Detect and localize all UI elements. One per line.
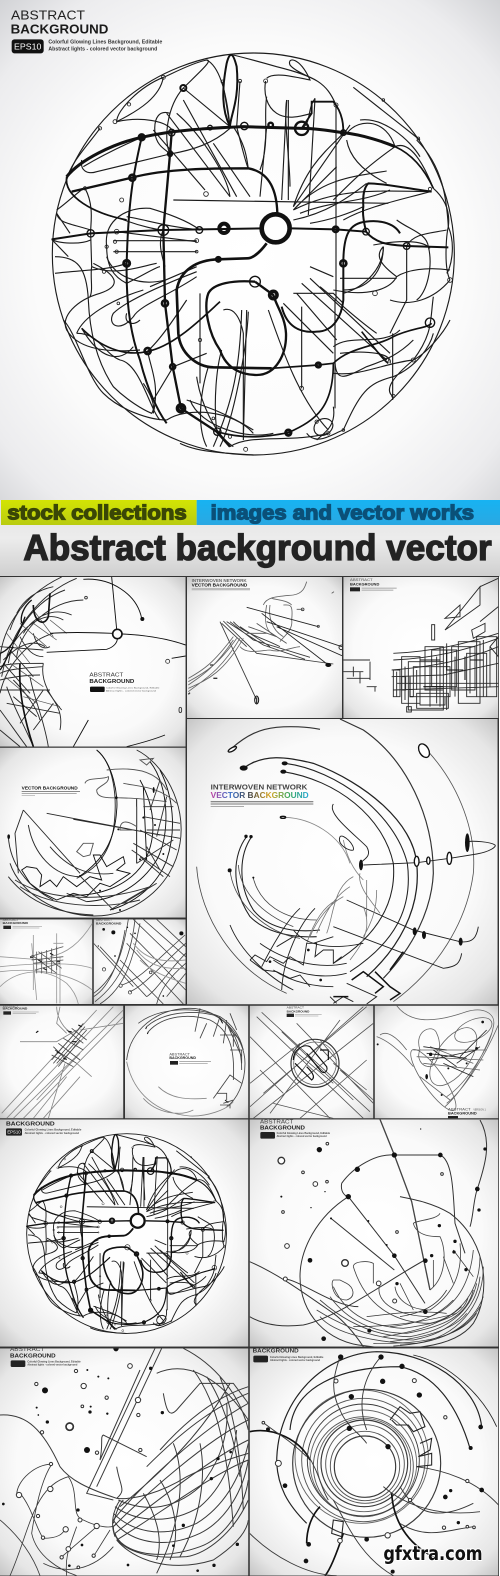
- panel: sphere left with abstract background text: Colorful Glowing Lines Background, Editable: [106, 687, 160, 690]
- panel: sphere left with abstract background text: ABSTRACT: [89, 672, 124, 678]
- panel: diagonal band with blob: BACKGROUND: [3, 1007, 28, 1011]
- panel: concentric arcs interwoven network: [187, 719, 498, 1004]
- panel: half sphere vector background: [0, 748, 186, 918]
- title band background: [0, 500, 500, 577]
- panel: maze lines: BACKGROUND: [350, 582, 380, 586]
- panel: small blob lines: BACKGROUND: [3, 921, 29, 925]
- panel: crossing lines with circle: [250, 1006, 374, 1118]
- panel: sphere left with abstract background text: Abstract lights - colored vector background: [106, 689, 157, 692]
- panel: interwoven network small: [187, 577, 342, 718]
- panel: tilted ellipses: [374, 1006, 498, 1118]
- watermark: gfxtra.com: gfxtra.com: [383, 1542, 483, 1565]
- panel: interwoven network small: INTERWOVEN NETWORK: [192, 578, 247, 583]
- panel: small diagonal lines with dots: [94, 918, 186, 1004]
- panel: concentric circles: Abstract lights - colored vector background: [270, 1359, 320, 1362]
- panel: fan network with dots: Colorful Glowing Lines Background, Editable: [27, 1361, 81, 1364]
- panel: ring arcs with abstract text: BACKGROUND: [169, 1056, 197, 1060]
- panel: tilted ellipses: ABSTRACT: [448, 1107, 471, 1111]
- panel: ring arcs with abstract text: [125, 1006, 248, 1118]
- panel: tilted ellipses: VERSION 1: [473, 1109, 486, 1111]
- panel: lower bowl network with dots: ABSTRACT: [260, 1119, 294, 1125]
- panel: crossing lines with circle: BACKGROUND: [287, 1009, 310, 1013]
- panel: half sphere vector background: VECTOR BACKGROUND: [22, 786, 78, 791]
- hero title: abstract background: Abstract lights - colored vector background: [48, 46, 158, 52]
- panel: concentric arcs interwoven network: VECTOR BACKGROUND: [211, 791, 309, 800]
- panel: sphere reduced copy: EPS10: [7, 1130, 21, 1135]
- panel: concentric arcs interwoven network: INTERWOVEN NETWORK: [211, 784, 307, 791]
- panel: maze lines: [343, 577, 498, 718]
- panel: sphere reduced copy: Colorful Glowing Lines Background, Editable: [25, 1129, 82, 1132]
- banner: images and vector works: images and vector works: [211, 501, 474, 524]
- panel: lower bowl network with dots: [250, 1119, 498, 1347]
- panel: diagonal band with blob: ABSTRACT: [3, 1004, 19, 1008]
- panel: lower bowl network with dots: Colorful Glowing Lines Background, Editable: [277, 1132, 331, 1135]
- gallery frame: [0, 576, 499, 1576]
- panel: interwoven network small: VECTOR BACKGROUND: [192, 583, 248, 588]
- hero title: abstract background: [11, 7, 162, 53]
- panel: sphere reduced copy: Abstract lights - colored vector background: [25, 1132, 79, 1135]
- panel: sphere reduced copy: BACKGROUND: [6, 1122, 55, 1128]
- panel: ring arcs with abstract text: ABSTRACT: [169, 1052, 190, 1056]
- hero panel background: [0, 0, 500, 500]
- hero title: abstract background: Colorful Glowing Lines Background, Editable: [48, 39, 162, 45]
- panel: sphere reduced copy: [0, 1119, 248, 1347]
- panel: concentric circles: [250, 1348, 498, 1576]
- panel: diagonal band with blob: [0, 1004, 124, 1118]
- banner: stock collections: stock collections: [7, 501, 187, 524]
- panel: concentric circles: Colorful Glowing Lines Background, Editable: [270, 1356, 324, 1359]
- panel: tilted ellipses: BACKGROUND: [448, 1111, 477, 1115]
- panel: sphere left with abstract background text: [0, 577, 186, 747]
- panel: fan network with dots: [0, 1347, 248, 1576]
- hero title: abstract background: BACKGROUND: [11, 21, 109, 36]
- panel: small blob lines: ABSTRACT: [3, 918, 19, 922]
- main title: Abstract background vector: [23, 527, 492, 568]
- hero title: abstract background: ABSTRACT: [11, 7, 85, 22]
- panel: small diagonal lines with dots: BACKGROUND: [96, 922, 122, 926]
- panel: lower bowl network with dots: BACKGROUND: [260, 1125, 305, 1131]
- panel: fan network with dots: Abstract lights - colored vector background: [27, 1364, 78, 1367]
- hero network sphere: [52, 53, 454, 455]
- panel: fan network with dots: BACKGROUND: [10, 1354, 56, 1360]
- panel: lower bowl network with dots: Abstract lights - colored vector background: [277, 1135, 327, 1138]
- panel: sphere left with abstract background text: BACKGROUND: [89, 679, 135, 685]
- panel: small diagonal lines with dots: ABSTRACT: [96, 918, 112, 922]
- hero title: abstract background: EPS10: [14, 41, 42, 51]
- panel: small blob lines: [0, 918, 92, 1004]
- panel: maze lines: ABSTRACT: [350, 578, 373, 582]
- panel: fan network with dots: ABSTRACT: [10, 1347, 45, 1353]
- panel: concentric circles: BACKGROUND: [253, 1349, 299, 1355]
- panel: crossing lines with circle: ABSTRACT: [287, 1006, 304, 1010]
